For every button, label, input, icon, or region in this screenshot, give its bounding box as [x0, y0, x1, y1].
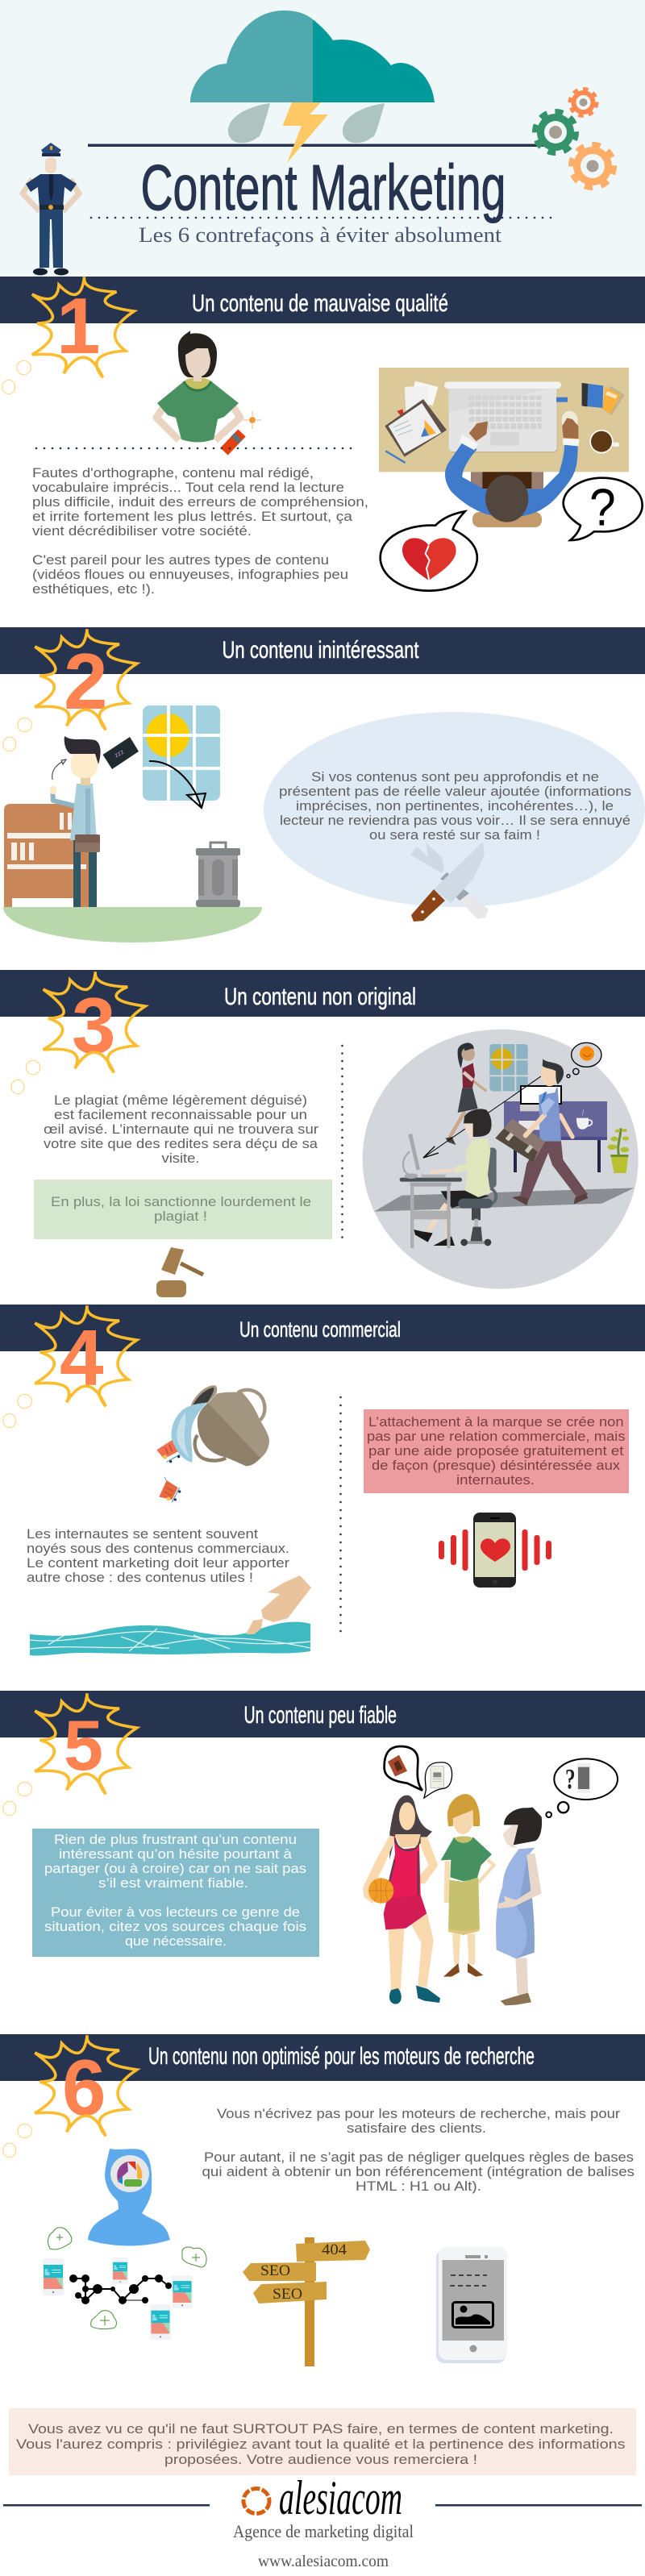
- section 4 panel: [0, 1305, 645, 1655]
- section 6 text: Vous n'écrivez pas pour les moteurs de recherche, mais pour: [217, 2106, 620, 2121]
- section 1 band: [0, 277, 645, 323]
- icon: large phone with image: [436, 2247, 507, 2363]
- section 3 text: œil avisé. L’internaute qui ne trouvera sur: [44, 1122, 318, 1137]
- section 6 text: Pour autant, il ne s’agit pas de négliger quelques règles de bases: [204, 2149, 634, 2165]
- section 3 band: [0, 970, 645, 1017]
- section 3 heading: Un contenu non original: [224, 984, 416, 1010]
- section 1 panel: [0, 277, 645, 597]
- footer url: www.alesiacom.com: [258, 2553, 389, 2570]
- section 3 number: 3: [72, 981, 116, 1070]
- section 4 text: noyés sous des contenus commerciaux.: [27, 1541, 289, 1556]
- section 1 text: (vidéos floues ou ennuyeuses, infographies peu: [32, 567, 348, 582]
- logo: alesiacom: alesiacom: [279, 2471, 402, 2524]
- callout: green box: [34, 1180, 332, 1239]
- section 6 number: 6: [62, 2043, 106, 2132]
- section 4 heading: Un contenu commercial: [239, 1317, 401, 1342]
- section 1 text: vocabulaire imprécis... Tout cela rend la lecture: [32, 480, 344, 495]
- section 2 heading: Un contenu inintéressant: [223, 637, 419, 664]
- icon: storm cloud: [190, 10, 435, 163]
- section 2 text: Si vos contenus sont peu approfondis et ne: [311, 769, 599, 784]
- footer tagline: Agence de marketing digital: [233, 2521, 414, 2541]
- illustration: office scene: [363, 1030, 639, 1289]
- section 5 bubbles: [3, 1782, 31, 1816]
- section 6 bubbles: [3, 2124, 31, 2158]
- section 3 text: votre site que des redites sera déçu de sa: [44, 1136, 318, 1151]
- icon: phone tablet with zzz: [103, 737, 139, 769]
- icon: bookcase: [4, 804, 89, 907]
- section 1 text: C'est pareil pour les autres types de contenu: [32, 552, 329, 568]
- section 4 text: autre chose : des contenus utiles !: [27, 1570, 253, 1585]
- dotted separator: [36, 447, 358, 449]
- section 3 text: Le plagiat (même légèrement déguisé): [54, 1092, 307, 1108]
- callout: blue box: s’il est vraiment fiable.: [98, 1875, 248, 1891]
- section 5 band: [0, 1691, 645, 1737]
- section 5 panel: [0, 1691, 645, 2005]
- section 2 text: ou sera resté sur sa faim !: [369, 827, 540, 843]
- callout: red box: L’attachement à la marque se crée non: [368, 1414, 624, 1429]
- section 1 text: esthétiques, etc !).: [32, 581, 155, 597]
- conclusion box: [9, 2408, 636, 2475]
- section 1 text: Fautes d'orthographe, contenu mal rédigé,: [32, 465, 314, 481]
- section 2 text: [279, 769, 631, 843]
- callout: blue box: Rien de plus frustrant qu’un contenu: [54, 1832, 297, 1847]
- subtitle: Les 6 contrefaçons à éviter absolument: [139, 223, 502, 247]
- illustration: person at desk: [379, 368, 643, 591]
- callout: red box: de façon (presque) désintéressée aux: [372, 1458, 621, 1473]
- section 2 number: 2: [64, 637, 108, 726]
- callout ellipse: [264, 712, 645, 907]
- illustration: three women with thought bubbles: [363, 1746, 618, 2005]
- callout: blue box: Pour éviter à vos lecteurs ce genre de: [51, 1904, 300, 1920]
- section 1 text: vient décrédibiliser votre société.: [32, 523, 252, 539]
- icon: phone tablet with zzz: zzz: [113, 748, 125, 759]
- illustration: person at desk: ?: [589, 477, 616, 536]
- section 5 starburst: [35, 1693, 137, 1794]
- section 2 panel: [0, 627, 645, 943]
- icon: knife and fork: [410, 842, 489, 922]
- section 1 text: et irrite fortement les plus lettrés. Et surtout, ça: [32, 509, 353, 524]
- icon: phones network: [42, 2258, 193, 2340]
- section 1 starburst: [32, 277, 134, 377]
- big arrow into bin: [149, 761, 206, 808]
- icon: plus clouds: [48, 2228, 206, 2329]
- section 2 starburst: [35, 629, 137, 730]
- section 2 text: imprécises, non pertinentes, incohérentes…), le: [296, 798, 614, 814]
- section 1 text: plus difficile, induit des erreurs de compréhension,: [32, 494, 368, 510]
- callout: green box: plagiat !: [154, 1209, 207, 1224]
- section 6 panel: [0, 2034, 645, 2366]
- header line: [88, 144, 543, 147]
- small arrow: [52, 759, 66, 780]
- dotted separator: [91, 217, 551, 218]
- icon: signpost: 404: [322, 2241, 347, 2258]
- section 3 text: [44, 1092, 318, 1166]
- callout: blue box: partager (ou à croire) car on ne sait pas: [44, 1861, 306, 1876]
- callout: red box: par une aide proposée gratuitement et: [368, 1443, 624, 1459]
- section 1 number: 1: [56, 281, 101, 370]
- callout: blue box: [32, 1829, 319, 1957]
- section 6 band: [0, 2034, 645, 2081]
- conclusion box: proposées. Votre audience vous remerciera !: [164, 2452, 477, 2467]
- icon: signpost: SEO: [260, 2262, 290, 2279]
- section 2 band: [0, 627, 645, 674]
- section 6 starburst: [35, 2035, 137, 2136]
- section 4 text: Le content marketing doit leur apporter: [27, 1555, 289, 1571]
- icon: trash bin: [196, 843, 240, 907]
- illustration: water and hands: [30, 1575, 311, 1655]
- callout: blue box: que nécessaire.: [125, 1933, 227, 1949]
- section 1 heading: Un contenu de mauvaise qualité: [192, 290, 448, 317]
- section 4 band: [0, 1305, 645, 1351]
- icon: gears: [535, 89, 614, 187]
- icon: jug pouring water onto shopping carts: [156, 1385, 269, 1502]
- section 6 text: qui aident à obtenir un bon référencement (intégration de balises: [202, 2164, 635, 2179]
- ground: [3, 907, 262, 943]
- section 5 number: 5: [64, 1705, 103, 1785]
- section 4 text: [27, 1526, 289, 1585]
- icon: police officer: [23, 143, 79, 276]
- section 3 panel: [0, 970, 645, 1297]
- conclusion box: Vous l'aurez compris : privilégiez avant tout la qualité et la pertinence des informations: [16, 2437, 626, 2452]
- icon: gavel: [156, 1247, 203, 1297]
- icon: phone with heart: [439, 1513, 551, 1588]
- icon: window with sun: [143, 705, 220, 801]
- section 3 starburst: [44, 972, 145, 1072]
- section 4 text: Les internautes se sentent souvent: [27, 1526, 258, 1542]
- callout: red box: [364, 1409, 629, 1493]
- callout: blue box: intéressant qu’on hésite pourtant à: [59, 1846, 293, 1862]
- section 6 text: satisfaire des clients.: [347, 2120, 486, 2136]
- icon: signpost: [243, 2237, 370, 2366]
- section 3 text: visite.: [161, 1151, 200, 1166]
- section 2 text: présentent pas de réelle valeur ajoutée (informations: [279, 784, 631, 799]
- icon: dynamite: [224, 411, 261, 452]
- section 2 text: lecteur ne reviendra pas vous voir… Il se sera ennuyé: [280, 813, 630, 828]
- section 6 text: HTML : H1 ou Alt).: [356, 2179, 481, 2194]
- dotted vertical: [339, 1397, 342, 1638]
- section 4 number: 4: [60, 1313, 104, 1402]
- section 2 bubbles: [3, 718, 31, 751]
- callout: red box: internautes.: [456, 1472, 535, 1488]
- icon: signpost: SEO: [273, 2286, 302, 2303]
- conclusion box: Vous avez vu ce qu'il ne faut SURTOUT PAS faire, en termes de content marketing.: [28, 2421, 614, 2437]
- section 6 text: [202, 2106, 635, 2194]
- icon: angry woman: [156, 331, 240, 442]
- illustration: three women with thought bubbles: ?: [565, 1763, 576, 1796]
- footer lines: [3, 2504, 642, 2506]
- section 1 bubbles: [2, 360, 31, 394]
- section 4 bubbles: [3, 1394, 31, 1428]
- section 1 text: [32, 465, 368, 597]
- section 5 heading: Un contenu peu fiable: [243, 1702, 397, 1729]
- header background: [0, 0, 645, 277]
- callout: green box: En plus, la loi sanctionne lourdement le: [51, 1194, 311, 1209]
- logo: alesiacom: [243, 2471, 402, 2524]
- section 4 starburst: [35, 1305, 137, 1406]
- section 3 bubbles: [11, 1060, 40, 1094]
- icon: man with briefcase: [50, 736, 101, 907]
- dotted vertical: [341, 1046, 343, 1244]
- section 3 text: est facilement reconnaissable pour un: [54, 1107, 307, 1122]
- callout: red box: pas par une relation commerciale, mais: [367, 1429, 626, 1444]
- callout: blue box: situation, citez vos sources chaque fois: [44, 1919, 306, 1934]
- icon: head silhouette with photo logo: [88, 2149, 170, 2246]
